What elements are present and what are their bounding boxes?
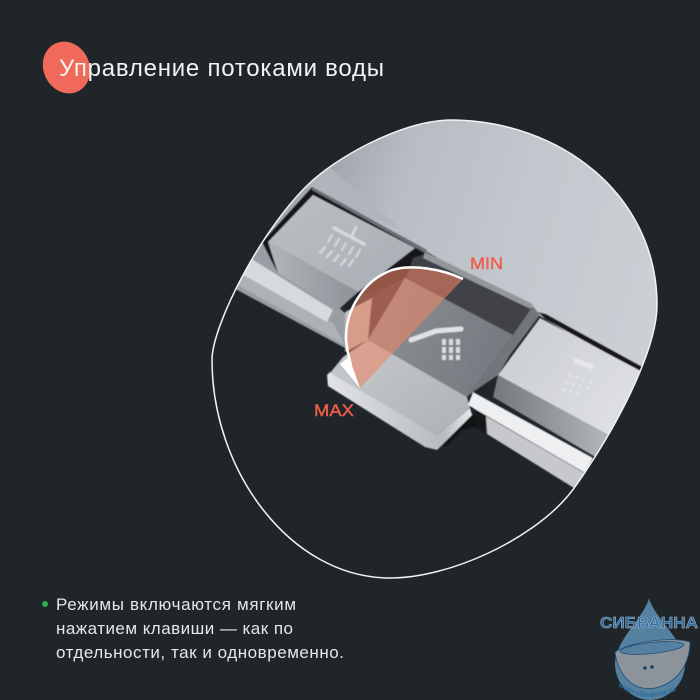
black recess [262,187,427,296]
egg outline [212,120,657,578]
site address: www.sibvanna.ru [618,682,676,697]
white pointer tip [340,357,360,388]
centre key pressed [327,252,540,450]
label MAX: MAX [314,401,354,420]
white strip [468,392,593,473]
bathtub rim [620,639,684,657]
watermark logo [600,598,698,700]
recess upper rim [423,252,533,309]
title text: Управление потоками воды [59,55,384,82]
icon: hand shower [411,329,461,360]
coral blob [34,34,99,101]
coral wedge [346,267,463,388]
flap front edge [327,372,472,450]
description text: отдельности, так и одновременно. [56,643,344,662]
outer chrome body [236,242,346,348]
right key shadow [474,406,486,433]
key side chrome [467,306,540,397]
lower chrome body [236,273,345,345]
description text: Режимы включаются мягким [56,595,296,614]
description text [56,595,344,662]
left inner wall light [345,298,372,352]
steel plate [264,120,656,367]
key front face [268,242,358,310]
tub face [643,665,654,670]
title with coral blob [34,34,384,101]
flap top [330,340,470,435]
bullet text block [42,595,344,662]
dark recess back [405,254,533,335]
left key recess and chrome bar [228,187,427,348]
right key front [493,375,612,458]
icon: small shower [562,358,594,395]
green bullet [42,601,48,607]
lower right body [486,416,586,488]
plate bevel [306,168,399,228]
recess highlight [312,187,427,253]
right plate groove [538,312,642,371]
icon: rain shower [320,227,364,266]
bright chrome strip [240,258,333,322]
key top face [268,195,415,292]
label MIN: MIN [470,254,503,273]
description text: нажатием клавиши — как по [56,619,293,638]
brand name: СИБВАННА [600,615,698,632]
white arc outline [346,267,463,365]
right key top [498,318,650,437]
flap shadow [440,413,487,447]
left inner wall dark [368,282,402,336]
key slope [368,278,513,397]
bathtub [615,640,690,689]
product photo inside egg frame [236,120,656,488]
water drop [615,598,685,700]
right key [468,312,650,488]
travel range wedge [340,267,463,388]
